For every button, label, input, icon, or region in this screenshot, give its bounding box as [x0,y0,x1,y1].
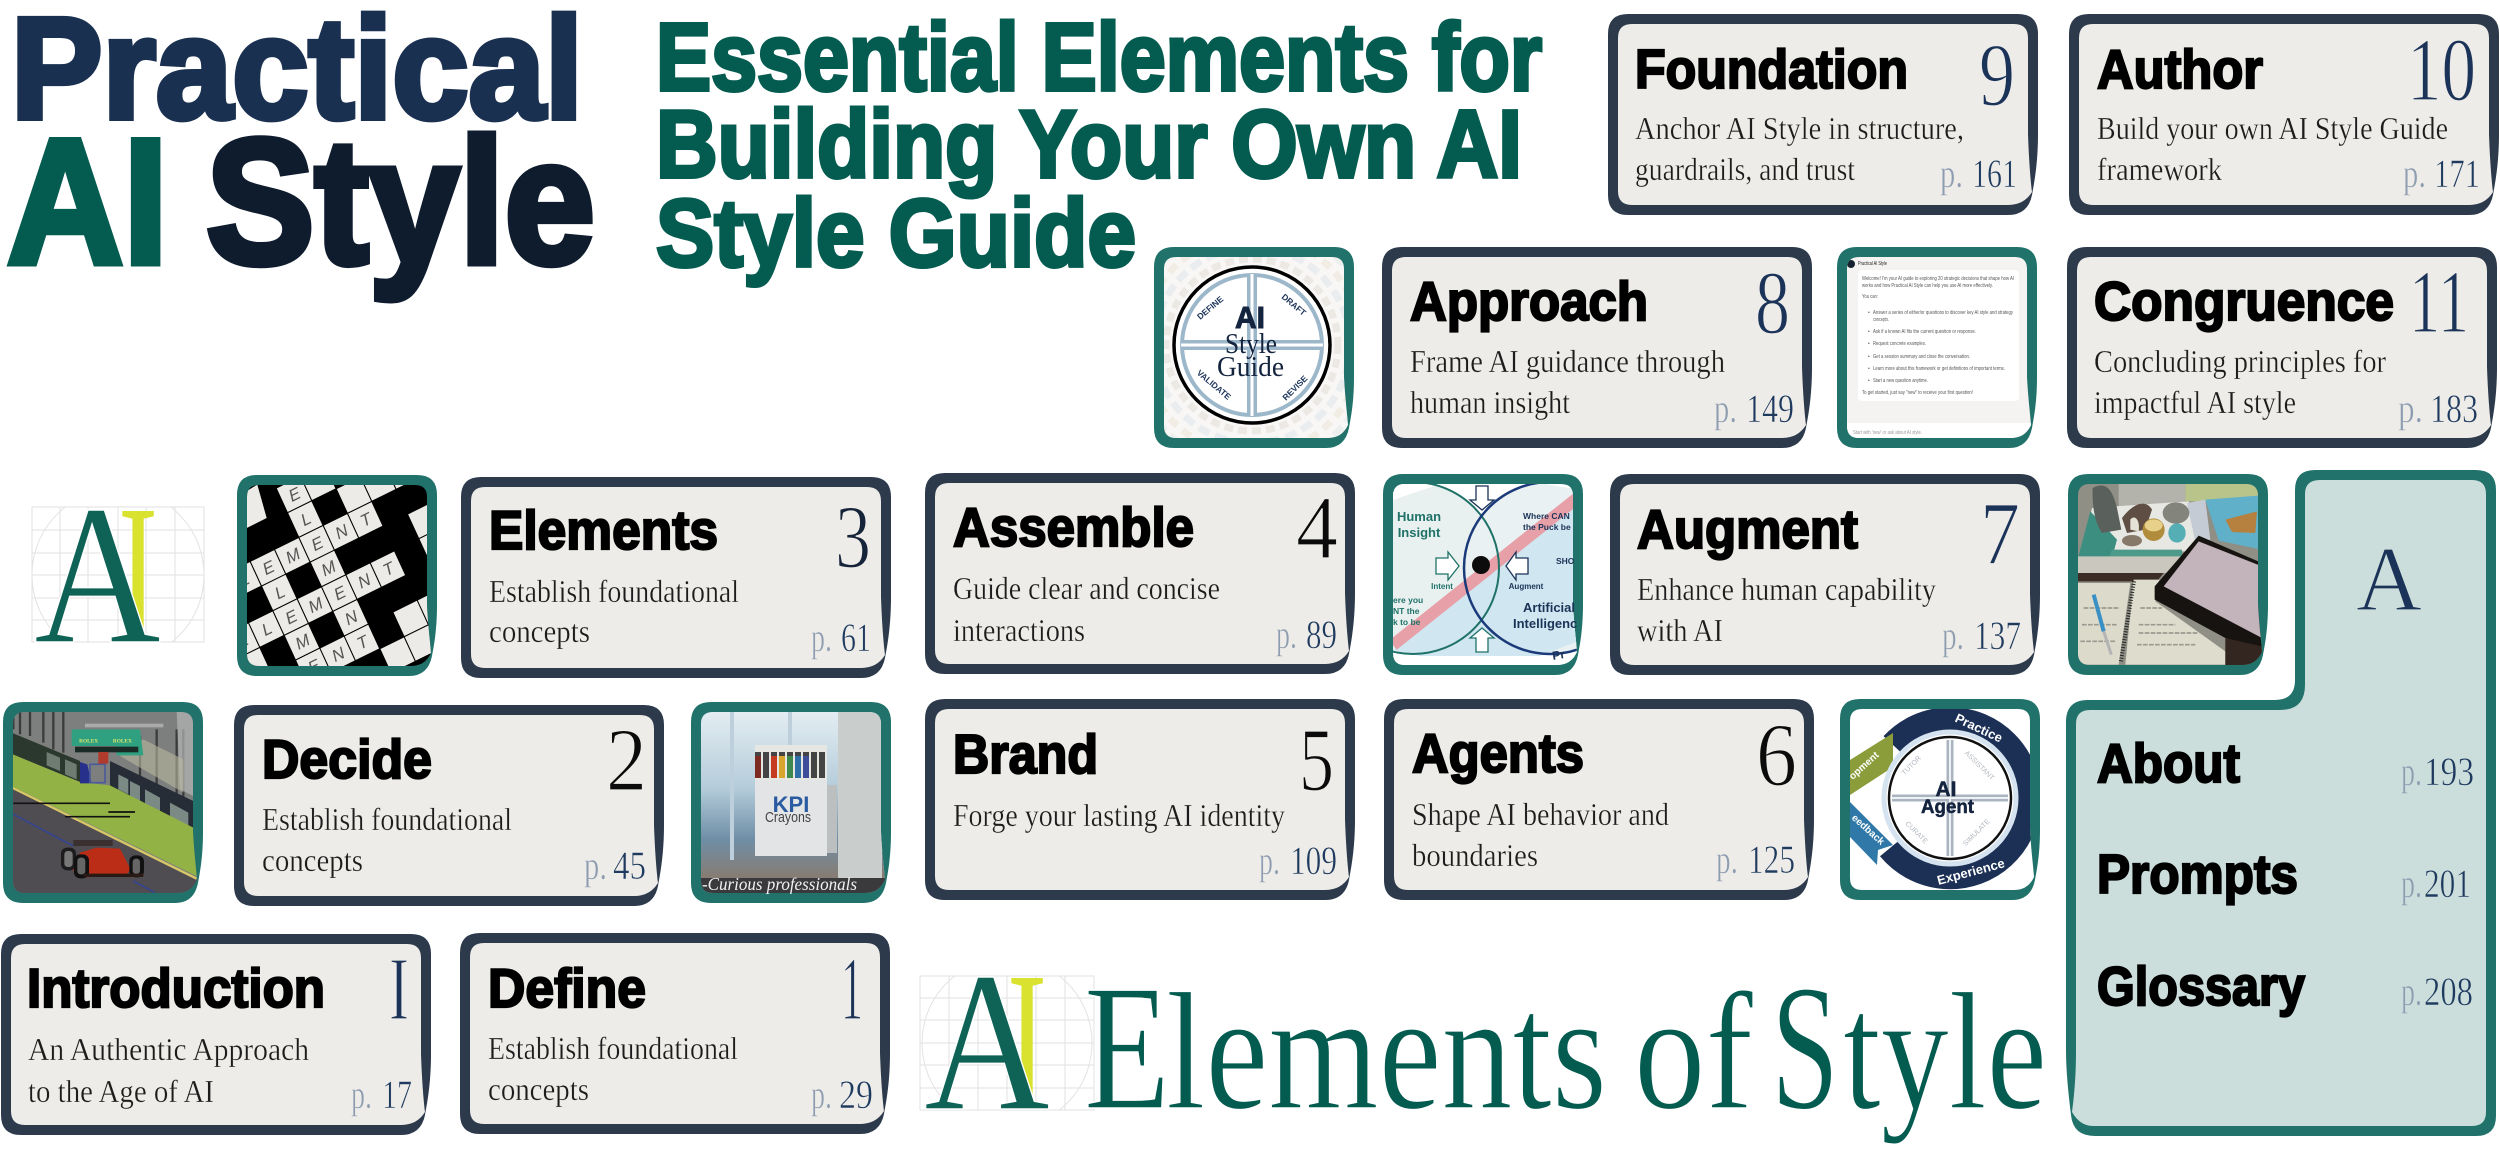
subtitle: Essential Elements: Essential Elements for [656,4,1542,111]
card: Author 10: framework [2097,151,2222,187]
logo: AI monogram on construction grid [32,506,204,642]
image card: crossword of ELEMENT: T [357,508,376,531]
card: Agents 6: 6 [1756,706,1797,805]
card: Introduction I [1,934,431,1135]
card: Approach 8 [1382,247,1812,448]
card: Foundation 9: Anchor AI Style in structure, [1635,110,1964,146]
card: Brand 5: p. [1259,838,1280,883]
title: Practical AI Style [7,0,595,301]
crossword cells [247,485,431,666]
image card: hockey puck Venn diagram: ere you [1393,595,1423,605]
image card: hockey puck Venn diagram: Artificial [1523,600,1575,615]
card: Define 1: p. [811,1072,832,1117]
card: Elements 3: Establish foundational [489,573,739,609]
panel: appendices: Prompts [2097,843,2298,905]
image card: AI Style Guide wheel: DRAFT [1280,292,1309,318]
card: Introduction I: p. [351,1072,372,1117]
image card: AI Agent cycle diagram: ASSISTANT [1963,750,1996,782]
image card: KPI Crayons box [691,702,891,903]
image card: crossword of ELEMENT: L [236,569,252,591]
image card: crossword of ELEMENT: M [283,544,303,568]
card: Define 1: Establish foundational [488,1030,738,1066]
card: Assemble 4: 89 [1306,612,1337,657]
card: Define 1: 29 [839,1072,873,1117]
image card: chat screenshot: You can: [1862,294,1878,300]
card: Assemble 4 [925,473,1355,674]
image card: AI Style Guide wheel: Guide [1217,352,1284,383]
card: Decide 2 [234,705,664,906]
logo: AI monogram beside wordmark: A [924,932,1050,1153]
image card: crossword of ELEMENT: E [331,582,350,604]
card: Foundation 9 [1608,14,2038,215]
card: Congruence 11: impactful AI style [2094,384,2296,420]
image card: chat screenshot: Get a session summary and close the conversation. [1873,354,1970,360]
image card: hockey puck Venn diagram [1383,474,1583,675]
image card: chat screenshot: Request concrete examples. [1873,341,1926,347]
image card: AI Agent cycle diagram: eedback [1849,813,1887,848]
card: Congruence 11 [2067,247,2497,448]
card: Brand 5: Brand [953,723,1098,785]
card: Elements 3: Elements [489,499,718,561]
image card: chat screenshot: Ask if a known AI fits the current question or response. [1873,329,1976,335]
card: Author 10 [2069,14,2499,215]
subtitle: Essential Elements: Style Guide [656,180,1136,287]
image card: chat screenshot: Practical AI Style [1858,261,1887,267]
card: Author 10: Author [2097,38,2263,100]
image card: chat screenshot: works and how Practical AI Style can help you use AI more effectively. [1862,283,1993,289]
image card: crossword of ELEMENT: E [234,630,252,652]
card: Elements 3: concepts [489,613,590,649]
logo: AI monogram on construction grid: A [34,465,161,686]
wordmark: Elements of Style: tyle [1843,959,2047,1145]
card: Foundation 9: 161 [1972,151,2017,196]
card: Elements 3 [461,477,891,678]
image card: hockey puck Venn diagram: Intelligenc [1513,616,1577,631]
card: Augment 7: Augment [1637,498,1858,560]
subtitle: Essential Elements: Building Your Own AI [656,91,1522,198]
image card: hockey puck Venn diagram: Where CAN [1523,511,1570,521]
card: Brand 5: 109 [1290,838,1337,883]
image card: crossword of ELEMENT: L [272,582,288,603]
card: Introduction I: 17 [382,1072,412,1117]
card: Introduction I: to the Age of AI [28,1073,214,1109]
card: Define 1 [460,933,890,1134]
panel: appendices: 201 [2424,861,2471,906]
panel: appendices: 208 [2424,969,2473,1014]
image card: crossword of ELEMENT: N [329,643,348,666]
card: Foundation 9: 9 [1979,26,2015,125]
card: Agents 6: Shape AI behavior and [1412,796,1669,832]
panel: appendices: p. [2401,861,2422,906]
card: Brand 5 [925,699,1355,900]
image card: chat screenshot: • [1868,378,1870,384]
card: Agents 6 [1384,699,1814,900]
image card: chat screenshot: • [1868,341,1870,347]
image card: AI Agent cycle diagram: SIMULATE [1962,818,1992,848]
card: Approach 8: 149 [1746,386,1794,431]
card: Foundation 9: guardrails, and trust [1635,151,1855,187]
image card: hockey puck Venn diagram: Human [1397,509,1441,524]
image card: chat screenshot: Answer a series of either/or questions to discover key AI style and strategy [1873,310,2013,316]
image card: crossword of ELEMENT: E [282,606,301,628]
image card: AI Agent cycle diagram: opment [1847,750,1882,782]
image card: AI Style Guide wheel: VALIDATE [1195,368,1233,402]
panel: appendices: 193 [2424,749,2474,794]
image card: crossword of ELEMENT: M [318,557,339,580]
image card: hockey puck Venn diagram: Pr [1551,647,1566,663]
image card: chat screenshot: • [1868,366,1870,372]
image card: AI Style Guide wheel [1154,247,1354,448]
image card: crossword of ELEMENT: L [298,509,314,530]
wordmark: Elements of Style [1084,948,2047,1147]
card: Define 1: Define [488,957,646,1019]
card: Congruence 11: 183 [2430,386,2478,431]
card: Augment 7: 7 [1980,485,2020,584]
card: Assemble 4: 4 [1296,479,1338,578]
card: Decide 2: Establish foundational [262,801,512,837]
card: Elements 3: 3 [835,488,871,587]
image card: crossword of ELEMENT [237,475,437,676]
image card: hockey puck Venn diagram: the Puck be [1523,522,1571,532]
image card: F1 race car on track [3,702,203,903]
image card: AI Agent cycle diagram: Experience [1935,855,2006,888]
card: Decide 2: concepts [262,842,363,878]
card: Introduction I: I [389,940,409,1039]
card: Congruence 11: 11 [2409,253,2469,352]
card: Author 10: 10 [2407,21,2476,120]
card: Assemble 4: Guide clear and concise [953,570,1220,606]
card: Decide 2: 45 [613,843,646,888]
image card: crossword of ELEMENT: T [354,631,373,653]
card: Augment 7: with AI [1637,612,1723,648]
image card: AI Agent cycle diagram: CURATE [1904,820,1929,846]
card: Define 1: concepts [488,1071,589,1107]
panel: appendices [2066,470,2496,1136]
image card: AI Agent cycle diagram: Agent [1921,797,1975,818]
card: Approach 8: 8 [1755,254,1790,353]
image card: chat screenshot: To get started, just say "new" to receive your first question! [1862,390,1973,396]
card: Assemble 4: Assemble [953,496,1194,558]
card: Agents 6: Agents [1412,722,1584,784]
wordmark: Elements of Style: of [1634,959,1753,1145]
card: Approach 8: p. [1714,386,1737,431]
image card: chat screenshot: Welcome! I'm your AI guide to exploring 20 strategic decisions that shape how AI [1862,276,2014,282]
card: Author 10: p. [2403,151,2426,196]
image card: hockey puck Venn diagram: k to be [1393,617,1421,627]
image card: crossword of ELEMENT: E [286,483,304,506]
card: Agents 6: boundaries [1412,837,1538,873]
image card: hockey puck Venn diagram: Augment [1509,582,1544,591]
card: Congruence 11: p. [2398,386,2423,431]
image card: crossword of ELEMENT: E [308,532,327,555]
panel: appendices: p. [2401,749,2422,794]
image card: AI Agent cycle diagram: Practice [1953,710,2005,745]
panel: appendices: A [2356,528,2422,630]
title: Practical AI Style: Style [206,102,595,301]
image card: desk with notebook and tablet [2068,474,2268,675]
image card: crossword of ELEMENT: N [332,520,352,543]
image card: hockey puck Venn diagram: Insight [1398,525,1441,540]
title: Practical AI Style: AI [7,102,168,301]
card: Brand 5: Forge your lasting AI identity [953,797,1285,833]
image card: crossword of ELEMENT: M [292,630,313,654]
image card: crossword of ELEMENT: N [342,606,361,629]
card: Augment 7: Enhance human capability [1637,571,1936,607]
image card: crossword of ELEMENT: M [305,594,326,617]
image card: AI Style Guide wheel: DEFINE [1195,294,1225,322]
image card: chat screenshot: Start a new question anytime. [1873,378,1928,384]
card: Define 1: 1 [841,940,863,1039]
image card: crossword of ELEMENT: L [259,619,275,640]
subtitle: Essential Elements [656,4,1542,287]
image card: chat screenshot: concepts. [1873,317,1889,323]
card: Augment 7: 137 [1974,613,2021,658]
image card: AI Style Guide wheel: Style [1225,329,1277,360]
card: Agents 6: p. [1716,837,1738,882]
image card: AI Agent cycle diagram: AI [1936,778,1956,801]
card: Brand 5: 5 [1299,711,1334,810]
card: Augment 7 [1610,474,2040,675]
image card: hockey puck Venn diagram: NT the [1393,606,1420,616]
wordmark: Elements of Style: lements [1166,959,1607,1145]
card: Agents 6: 125 [1748,837,1795,882]
panel: appendices: p. [2401,969,2422,1014]
image card: KPI Crayons box: -Curious professionals [702,874,857,894]
image card: hockey puck Venn diagram: Intent [1431,582,1453,591]
image card: crossword of ELEMENT: N [355,570,374,593]
image card: F1 race car on track: ROLEX [113,739,132,745]
card: Author 10: Build your own AI Style Guide [2097,110,2448,146]
image card: crossword of ELEMENT: T [380,558,399,580]
card: Augment 7: p. [1942,613,1964,658]
image card: chat screenshot: Start with 'new' or ask about AI style. [1853,430,1922,436]
image card: crossword of ELEMENT: E [305,655,324,678]
card: Assemble 4: interactions [953,612,1085,648]
card: Decide 2: Decide [262,728,432,790]
image card: hockey puck Venn diagram: SHO [1556,556,1575,566]
panel: appendices: Glossary [2097,955,2305,1017]
logo: AI monogram beside wordmark: I [1007,932,1047,1153]
card: Foundation 9: Foundation [1635,38,1908,100]
image card: F1 race car on track: ROLEX [79,739,98,745]
image card: AI Agent cycle diagram: TUTOR [1901,755,1923,777]
image card: chat screenshot: Learn more about this framework or get definitions of important terms. [1873,366,2005,372]
card: Introduction I: An Authentic Approach [28,1031,309,1067]
card: Decide 2: 2 [606,711,647,810]
card: Foundation 9: p. [1940,151,1963,196]
wordmark: Elements of Style: E [1084,948,1170,1147]
card: Elements 3: p. [811,615,832,660]
card: Approach 8: Approach [1410,270,1648,332]
image card: crossword of ELEMENT: E [260,556,278,579]
image card: KPI Crayons box: KPI [773,792,809,817]
card: Approach 8: human insight [1410,384,1570,420]
card: Congruence 11: Concluding principles for [2094,343,2386,379]
card: Author 10: 171 [2434,151,2480,196]
image card: KPI Crayons box: Crayons [765,809,811,826]
logo: AI monogram on construction grid: I [118,465,158,686]
card: Assemble 4: p. [1276,612,1297,657]
image card: AI Style Guide wheel: REVISE [1280,373,1310,402]
card: Congruence 11: Congruence [2094,270,2394,332]
image card: chat screenshot: • [1868,329,1870,335]
card: Elements 3: 61 [841,615,871,660]
logo: AI monogram beside wordmark [920,976,1094,1110]
panel: appendices: About [2097,732,2240,794]
image card: chat screenshot: • [1868,310,1870,316]
card: Decide 2: p. [584,843,607,888]
card: Introduction I: Introduction [27,957,325,1019]
image card: AI Agent cycle diagram [1840,699,2040,900]
card: Approach 8: Frame AI guidance through [1410,343,1725,379]
wordmark: Elements of Style: S [1771,948,1839,1147]
image card: chat screenshot: • [1868,354,1870,360]
image card: AI Style Guide wheel: AI [1235,300,1265,335]
image card: chat screenshot [1837,247,2037,448]
